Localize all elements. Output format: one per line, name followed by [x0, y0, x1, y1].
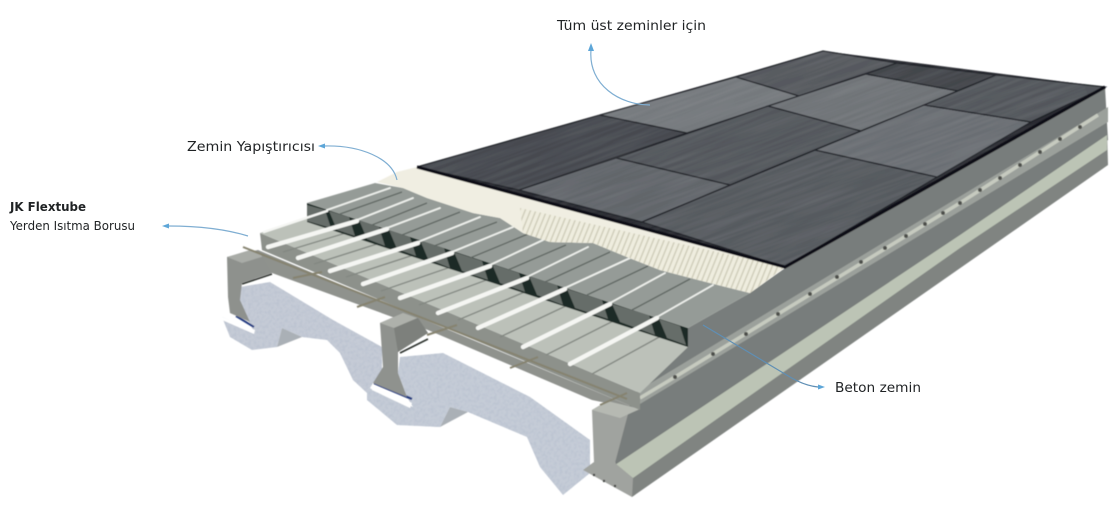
- heating pipes: [264, 188, 713, 364]
- floor tiles: [416, 50, 1108, 270]
- label: JK Flextube pipe: Yerden Isıtma Borusu: [9, 219, 135, 233]
- side: rope strip: [636, 107, 1108, 404]
- lower concrete blocks: [260, 218, 688, 410]
- label: JK Flextube pipe: [9, 200, 135, 233]
- thin pipe sections: [327, 188, 713, 317]
- label: concrete floor: Beton zemin: [835, 381, 921, 396]
- beam end face: [583, 401, 637, 497]
- notched trowel ribs: [520, 208, 785, 293]
- tie wire and cross bars: [243, 247, 627, 405]
- arrow: concrete: [703, 325, 825, 390]
- label: all upper floors: Tüm üst zeminler için: [556, 19, 706, 34]
- foam: white slots with blue edges: [222, 317, 255, 334]
- block end faces between pipes: [307, 205, 686, 345]
- concrete beam: left: [227, 250, 272, 322]
- insulation foam blocks: [220, 280, 595, 498]
- label: JK Flextube pipe: JK Flextube: [9, 200, 86, 214]
- rope with clips: [640, 115, 1098, 398]
- side: lower base: [613, 130, 1108, 497]
- arrow: adhesive: [318, 144, 397, 180]
- side: dark upper band: [615, 87, 1108, 465]
- foam: right piece: [367, 353, 590, 495]
- structure side with ledge: [583, 87, 1108, 497]
- label: floor adhesive: Zemin Yapıştırıcısı: [187, 140, 315, 155]
- adhesive layer: [377, 167, 785, 293]
- concrete web under blocks: [258, 250, 640, 410]
- grooves: [283, 225, 672, 374]
- concrete beam: middle: [373, 313, 428, 397]
- arrow: all upper floors: [588, 43, 650, 105]
- tile panels: [417, 51, 1105, 267]
- thick pipe sections: [264, 211, 657, 364]
- arrow: pipe: [162, 224, 248, 236]
- tile edge: [417, 87, 1105, 267]
- side: ledge: [615, 135, 1107, 478]
- foam texture: [220, 280, 595, 498]
- upper concrete blocks: [307, 183, 750, 347]
- foam: left piece: [222, 282, 382, 393]
- grooves: [340, 192, 690, 310]
- beam end holes: [593, 474, 616, 487]
- foam: underside notches: [277, 328, 302, 347]
